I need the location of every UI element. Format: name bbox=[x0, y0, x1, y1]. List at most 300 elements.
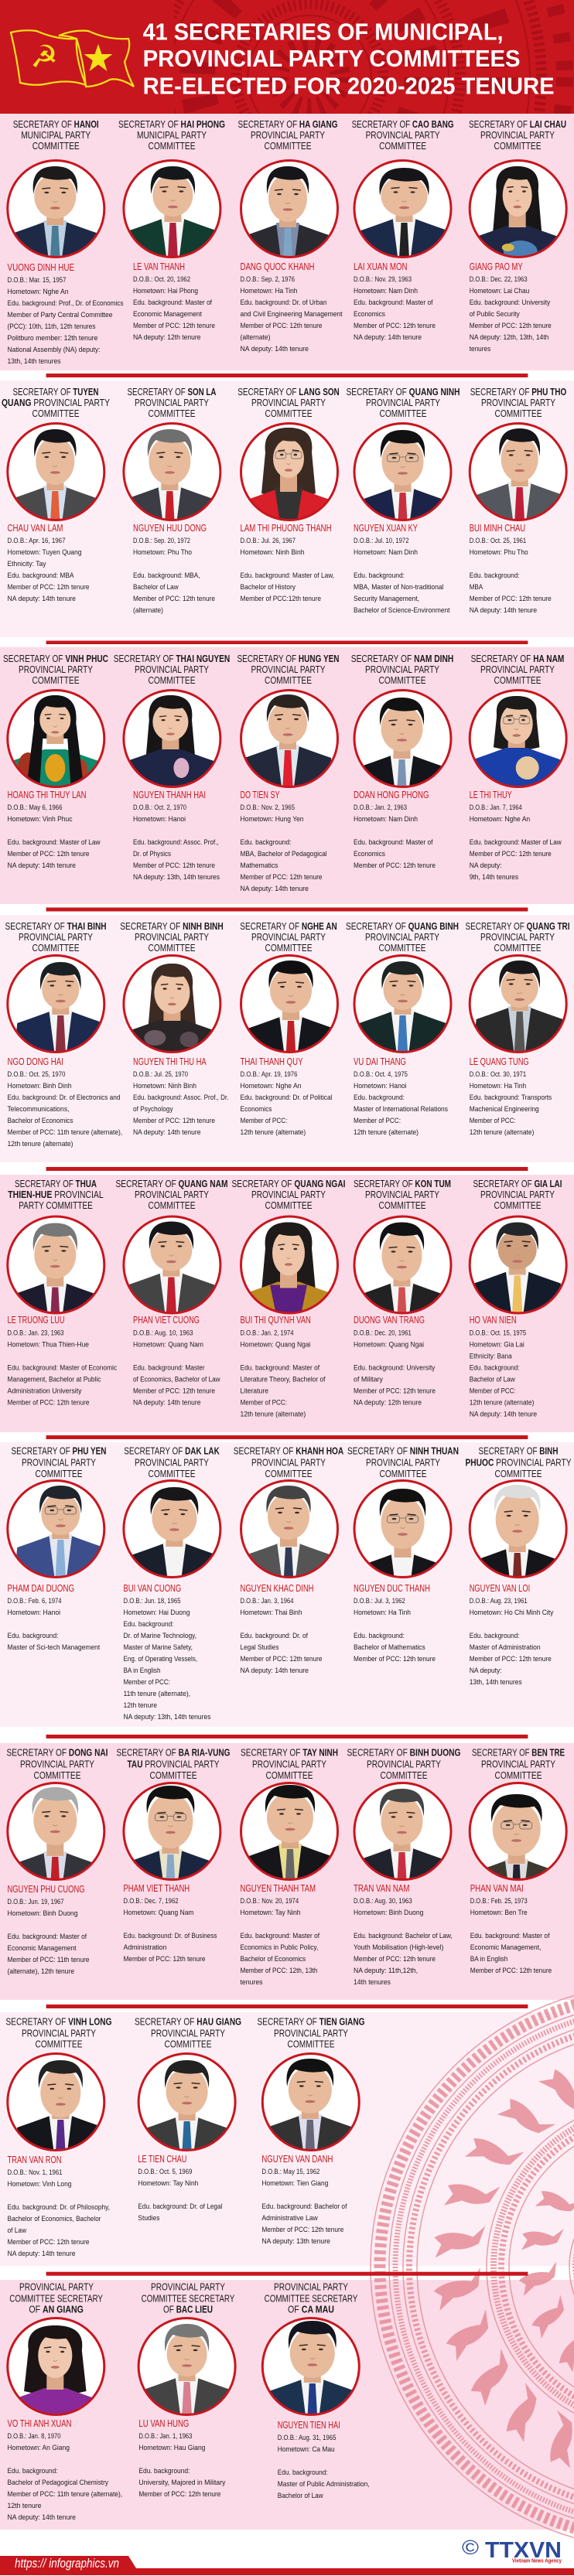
details: D.O.B.: Oct. 30, 1971 bbox=[470, 1070, 526, 1079]
heading: COMMITTEE bbox=[265, 1469, 313, 1479]
heading: COMMITTEE bbox=[149, 675, 195, 686]
portrait bbox=[240, 422, 339, 521]
heading bbox=[265, 2282, 358, 2315]
details: Member of PCC: 12th tenure bbox=[8, 850, 90, 858]
heading: COMMITTEE bbox=[149, 1200, 195, 1211]
heading: PARTY COMMITTEE bbox=[19, 1200, 93, 1211]
heading bbox=[114, 653, 230, 686]
details: 12th tenure bbox=[124, 1701, 157, 1710]
heading bbox=[124, 1446, 220, 1479]
details: tenures bbox=[240, 1978, 263, 1987]
card: Vinh Long bbox=[6, 2017, 111, 2258]
heading bbox=[240, 921, 337, 954]
logo: TTXVN: Vietnam News Agency bbox=[512, 2558, 562, 2564]
heading: SECRETARY OF DONG NAI bbox=[6, 1748, 108, 1759]
details: Hometown: Hanoi bbox=[133, 815, 186, 824]
heading: PROVINCIAL PARTY bbox=[365, 932, 440, 943]
heading bbox=[354, 1179, 451, 1211]
title: PROVINCIAL PARTY COMMITTEES bbox=[143, 45, 521, 72]
details: Hometown: Binh Dinh bbox=[8, 1082, 71, 1090]
details: Administrative Law bbox=[261, 2214, 318, 2223]
details: D.O.B.: Apr. 19, 1976 bbox=[240, 1070, 297, 1079]
portrait bbox=[240, 690, 337, 800]
details: Edu. background: Dr. of Urban bbox=[240, 299, 326, 307]
details: Hometown: Vinh Phuc bbox=[8, 815, 73, 824]
details bbox=[240, 804, 326, 893]
details: Hometown: Nam Dinh bbox=[354, 815, 418, 824]
portrait bbox=[122, 954, 221, 1053]
portrait bbox=[7, 1783, 104, 1907]
heading: COMMITTEE bbox=[265, 408, 313, 419]
details: Edu. background: Master bbox=[133, 1364, 205, 1372]
details: Member of PCC: 12th tenure bbox=[133, 322, 215, 330]
heading: TAU PROVINCIAL PARTY bbox=[127, 1759, 220, 1770]
card: Lang Son bbox=[237, 387, 340, 603]
details: Hometown: Tien Giang bbox=[261, 2179, 328, 2188]
details: MBA bbox=[470, 583, 483, 592]
card: Dak Lak bbox=[124, 1446, 222, 1721]
heading: COMMITTEE bbox=[149, 1469, 195, 1479]
heading: PROVINCIAL PARTY bbox=[366, 397, 441, 408]
details: D.O.B.: Sep. 20, 1972 bbox=[133, 537, 190, 545]
details: Legal Studies bbox=[240, 1643, 279, 1652]
portrait bbox=[241, 1216, 337, 1336]
portrait bbox=[470, 1480, 566, 1603]
details: Hometown: Thai Binh bbox=[240, 1609, 302, 1617]
details: Member of PCC: 12th tenure bbox=[133, 1117, 215, 1125]
details bbox=[354, 1329, 436, 1407]
details: Member of PCC: bbox=[354, 1117, 401, 1125]
details bbox=[240, 1329, 326, 1418]
portrait bbox=[354, 1783, 451, 1902]
name: BUI MINH CHAU bbox=[470, 523, 525, 534]
portrait bbox=[8, 1480, 108, 1590]
details: Hometown: Nam Dinh bbox=[354, 548, 418, 557]
heading: SECRETARY OF LANG SON bbox=[237, 387, 340, 397]
heading: SECRETARY OF QUANG NGAI bbox=[232, 1179, 345, 1189]
details: Member of PCC: 12th tenure bbox=[470, 850, 552, 858]
heading: OF CA MAU bbox=[288, 2305, 334, 2315]
heading: PROVINCIAL PARTY bbox=[251, 130, 326, 141]
heading: SECRETARY OF BA RIA-VUNG bbox=[116, 1748, 231, 1759]
name: LE TRUONG LUU bbox=[8, 1315, 65, 1326]
details: D.O.B.: Feb. 6, 1974 bbox=[8, 1597, 62, 1605]
details: Edu. background: Master of Law bbox=[470, 838, 562, 847]
card: Son La bbox=[121, 387, 220, 615]
details: NA deputy: 14th tenure bbox=[240, 1667, 309, 1675]
name: LAI XUAN MON bbox=[354, 261, 407, 272]
heading: PROVINCIAL PARTY bbox=[251, 1189, 326, 1200]
card: Ninh Thuan bbox=[347, 1446, 459, 1663]
details bbox=[8, 2168, 110, 2258]
heading bbox=[9, 2282, 103, 2315]
details: Edu. background: Dr. of Business bbox=[124, 1932, 217, 1940]
section rules bbox=[46, 374, 528, 2276]
details: Member of PCC: 12th tenure bbox=[8, 583, 90, 592]
details bbox=[8, 2432, 122, 2522]
heading: SECRETARY OF DAK LAK bbox=[124, 1446, 220, 1457]
details: Literature Theory, Bachelor of bbox=[240, 1375, 326, 1384]
details bbox=[8, 1070, 122, 1148]
heading: SECRETARY OF LAI CHAU bbox=[469, 119, 566, 130]
details: Ethnicity: Tay bbox=[8, 560, 46, 568]
card: Tien Giang bbox=[257, 2017, 365, 2246]
details: Economics in Public Policy, bbox=[240, 1943, 318, 1952]
details bbox=[138, 2168, 222, 2223]
heading: SECRETARY OF THUA bbox=[15, 1179, 97, 1189]
details: Hometown: Nghe An bbox=[470, 815, 530, 824]
details: Hometown: Ca Mau bbox=[278, 2445, 335, 2454]
portrait bbox=[469, 422, 568, 521]
heading: COMMITTEE bbox=[379, 943, 425, 954]
details: Bachelor of Mathematics bbox=[354, 1643, 425, 1652]
heading: COMMITTEE SECRETARY bbox=[142, 2294, 235, 2305]
website link: https:// infographics.vn bbox=[15, 2556, 119, 2571]
details: Hometown: Ha Tinh bbox=[470, 1082, 526, 1090]
details: Literature bbox=[240, 1387, 268, 1395]
portrait bbox=[138, 2054, 235, 2172]
heading: SECRETARY OF HUNG YEN bbox=[237, 653, 339, 664]
details: 9th, 14th tenures bbox=[470, 873, 518, 882]
details: 14th tenures bbox=[354, 1978, 391, 1987]
details: Youth Mobilisation (High-level) bbox=[354, 1943, 443, 1952]
details: Administration bbox=[124, 1943, 167, 1952]
details bbox=[354, 537, 450, 615]
name: BUI THI QUYNH VAN bbox=[240, 1315, 311, 1326]
details: D.O.B.: Jul. 10, 1972 bbox=[354, 537, 408, 545]
details: NA deputy: 14th tenure bbox=[133, 1398, 201, 1407]
details: Edu. background: bbox=[124, 1620, 173, 1629]
details: D.O.B.: Jan. 23, 1963 bbox=[8, 1329, 63, 1338]
details: Hometown: Phu Tho bbox=[133, 548, 192, 557]
details: Studies bbox=[138, 2214, 160, 2223]
details: Member of PCC: 12th tenure bbox=[261, 2226, 343, 2234]
details: Hometown: Hai Duong bbox=[124, 1609, 190, 1617]
heading: PROVINCIAL PARTY bbox=[251, 1458, 326, 1469]
details: Edu. background: Master of Economic bbox=[8, 1364, 117, 1372]
portrait bbox=[470, 956, 568, 1062]
details: (PCC): 10th, 11th, 12th tenures bbox=[8, 322, 96, 331]
details: NA deputy: bbox=[470, 1667, 502, 1675]
card: Tay Ninh bbox=[240, 1748, 338, 1987]
details: NA deputy: 14th tenure bbox=[8, 2513, 76, 2522]
heading bbox=[347, 387, 460, 419]
heading: COMMITTEE bbox=[32, 675, 79, 686]
portrait bbox=[354, 1216, 451, 1338]
heading: PROVINCIAL PARTY bbox=[20, 1759, 95, 1770]
details: Economics bbox=[354, 850, 385, 858]
heading: PROVINCIAL PARTY bbox=[251, 397, 326, 408]
details: Economic Management bbox=[133, 310, 202, 319]
card: Cao Bang bbox=[352, 119, 454, 342]
details: Bachelor of Economics bbox=[8, 1117, 73, 1125]
details: 12th tenure (alternate) bbox=[240, 1411, 306, 1418]
details: Hometown: Quang Ngai bbox=[240, 1341, 311, 1349]
heading bbox=[8, 1179, 104, 1211]
name: LE VAN THANH bbox=[133, 261, 185, 272]
heading: PROVINCIAL PARTY bbox=[480, 130, 555, 141]
name: PHAN VIET CUONG bbox=[133, 1315, 200, 1326]
heading: COMMITTEE bbox=[32, 141, 80, 152]
card: Thai Binh bbox=[5, 921, 122, 1148]
details: Edu. background: bbox=[8, 1632, 59, 1640]
heading: PROVINCIAL PARTY bbox=[481, 397, 556, 408]
heading: MUNICIPAL PARTY bbox=[137, 130, 207, 141]
heading: COMMITTEE bbox=[265, 141, 311, 152]
portrait bbox=[122, 689, 221, 788]
details bbox=[470, 1070, 552, 1137]
name: NGUYEN TIEN HAI bbox=[278, 2420, 340, 2431]
details: BA in English bbox=[124, 1667, 161, 1675]
name: THAI THANH QUY bbox=[240, 1056, 303, 1067]
details: Hometown: Vinh Long bbox=[8, 2180, 71, 2189]
details: Edu. background: Dr. of Legal bbox=[138, 2202, 222, 2211]
heading: COMMITTEE bbox=[494, 1200, 542, 1211]
details: Bachelor of Law bbox=[133, 583, 179, 592]
heading: SECRETARY OF KON TUM bbox=[354, 1179, 451, 1189]
heading bbox=[127, 387, 217, 419]
details: NA deputy: 14th tenure bbox=[470, 606, 537, 615]
details: Member of PCC: 11th tenure bbox=[8, 1956, 90, 1964]
details: Edu. background: Dr. of Political bbox=[240, 1094, 333, 1102]
heading: SECRETARY OF HANOI bbox=[13, 119, 99, 130]
details: Edu. background: bbox=[278, 2469, 328, 2477]
heading: SECRETARY OF HA GIANG bbox=[238, 119, 337, 130]
details: Member of PCC: 12th tenure bbox=[354, 1655, 436, 1663]
details: Hometown: Ben Tre bbox=[470, 1909, 528, 1917]
heading: PROVINCIAL PARTY bbox=[252, 1759, 327, 1770]
name: DO TIEN SY bbox=[240, 790, 280, 800]
details bbox=[133, 1070, 229, 1137]
details: Edu. background: bbox=[354, 1094, 405, 1102]
details: D.O.B.: Oct. 25, 1961 bbox=[470, 537, 526, 545]
name: PHAM DAI DUONG bbox=[8, 1583, 74, 1594]
heading: PROVINCIAL PARTY bbox=[481, 1759, 556, 1770]
details: NA deputy: 14th tenure bbox=[354, 333, 422, 342]
heading: SECRETARY OF VINH LONG bbox=[6, 2017, 111, 2028]
portrait bbox=[241, 1783, 338, 1899]
details: Master of Marine Safety, bbox=[124, 1643, 193, 1652]
heading: PROVINCIAL PARTY bbox=[274, 2028, 349, 2039]
details bbox=[470, 1329, 537, 1418]
details: Member of PCC: 12th tenure bbox=[240, 322, 322, 330]
details bbox=[354, 804, 436, 870]
details: D.O.B.: Oct. 15, 1975 bbox=[470, 1329, 526, 1338]
details: Ethnicity: Bana bbox=[470, 1352, 512, 1361]
details: Politburo member: 12th tenure bbox=[8, 334, 97, 343]
details: D.O.B.: Apr. 16, 1967 bbox=[8, 537, 65, 545]
portrait bbox=[6, 422, 105, 521]
heading: PROVINCIAL PARTY bbox=[365, 664, 440, 675]
portrait bbox=[123, 1216, 220, 1327]
details: Edu. background: bbox=[470, 571, 520, 580]
heading bbox=[11, 1446, 107, 1479]
card: Binh Duong bbox=[347, 1748, 461, 1987]
heading: PROVINCIAL PARTY bbox=[135, 1458, 210, 1469]
details: Hometown: Ho Chi Minh City bbox=[470, 1609, 554, 1617]
details: Edu. background: bbox=[354, 571, 405, 580]
name: PHAN VAN MAI bbox=[470, 1883, 524, 1894]
details: Member of PCC: bbox=[240, 1117, 287, 1125]
details: Member of PCC: 12th, 13th bbox=[240, 1967, 317, 1975]
details: Member of PCC: 12th tenure bbox=[354, 1387, 436, 1395]
details: Bachelor of Economics, Bachelor bbox=[8, 2215, 101, 2223]
details: Hometown: Phu Tho bbox=[470, 548, 528, 557]
heading: PROVINCIAL PARTY bbox=[19, 664, 94, 675]
heading: PROVINCIAL PARTY bbox=[365, 1189, 440, 1200]
details: D.O.B.: May 15, 1962 bbox=[261, 2168, 319, 2176]
details: NA deputy: 12th tenure bbox=[133, 333, 201, 342]
details: Hometown: Gia Lai bbox=[470, 1341, 524, 1349]
details: Edu. background: bbox=[138, 2467, 190, 2475]
heading bbox=[2, 387, 111, 419]
heading bbox=[142, 2282, 235, 2315]
portrait bbox=[8, 2054, 108, 2170]
details: Hometown: Hanoi bbox=[8, 1609, 60, 1617]
details: Member of PCC: 12th tenure bbox=[133, 862, 215, 870]
details: Hometown: Nghe An bbox=[8, 288, 68, 296]
details: Hometown: Hung Yen bbox=[240, 815, 303, 824]
heading bbox=[118, 119, 225, 152]
name: TRAN VAN RON bbox=[8, 2155, 62, 2165]
details bbox=[470, 1597, 554, 1687]
details bbox=[133, 537, 215, 615]
details: of Public Security bbox=[470, 310, 520, 319]
details: 13th, 14th tenures bbox=[470, 1678, 522, 1687]
details: D.O.B.: Jun. 18, 1965 bbox=[124, 1597, 181, 1605]
details: Master of Public Administration, bbox=[278, 2480, 370, 2489]
logo: TTXVN bbox=[462, 2536, 562, 2564]
heading: SECRETARY OF HA NAM bbox=[471, 653, 564, 664]
details: D.O.B.: Aug. 30, 1963 bbox=[354, 1897, 412, 1906]
details: tenures bbox=[470, 345, 490, 353]
name: NGUYEN PHU CUONG bbox=[8, 1884, 85, 1895]
heading: PROVINCIAL PARTY bbox=[135, 397, 210, 408]
details: Hometown: Hai Phong bbox=[133, 287, 198, 295]
card: Ha Nam bbox=[469, 653, 566, 882]
details: Economics bbox=[240, 1105, 272, 1114]
heading: MUNICIPAL PARTY bbox=[21, 130, 91, 141]
name: NGUYEN VAN LOI bbox=[470, 1583, 530, 1594]
name: VO THI ANH XUAN bbox=[8, 2418, 71, 2429]
details bbox=[354, 275, 436, 342]
heading bbox=[466, 1446, 572, 1479]
name: NGO DONG HAI bbox=[8, 1056, 63, 1067]
heading bbox=[13, 119, 99, 152]
title bbox=[143, 19, 555, 100]
name: NGUYEN VAN DANH bbox=[261, 2154, 333, 2165]
details: of Law bbox=[8, 2226, 26, 2235]
details: Member of PCC: 12th tenure bbox=[470, 1655, 552, 1663]
heading bbox=[241, 1748, 338, 1781]
heading: PROVINCIAL PARTY bbox=[135, 932, 210, 943]
details: Edu. background: bbox=[470, 1364, 520, 1372]
portrait bbox=[6, 954, 105, 1053]
details: Economic Management bbox=[8, 1944, 77, 1953]
name: NGUYEN THI THU HA bbox=[133, 1056, 207, 1067]
details: NA deputy: 13th, 14th tenures bbox=[133, 873, 220, 882]
heading: SECRETARY OF KHANH HOA bbox=[234, 1446, 343, 1457]
details: Member of PCC: bbox=[470, 1117, 516, 1125]
portrait bbox=[122, 1783, 220, 1905]
details: Edu. background: University bbox=[470, 299, 550, 307]
heading: SECRETARY OF PHU THO bbox=[470, 387, 566, 397]
heading: COMMITTEE bbox=[36, 1469, 82, 1479]
heading: COMMITTEE bbox=[265, 675, 312, 686]
card: Ninh Binh bbox=[120, 921, 229, 1137]
card: Thai Nguyen bbox=[114, 653, 230, 882]
title: 41 SECRETARIES OF MUNICIPAL, bbox=[143, 19, 504, 46]
heading: SECRETARY OF QUANG NAM bbox=[116, 1179, 227, 1189]
details: Member of PCC: 12th tenure bbox=[124, 1955, 206, 1964]
name: DANG QUOC KHANH bbox=[240, 261, 314, 272]
portrait bbox=[138, 2318, 235, 2432]
icon: party flag bbox=[11, 30, 86, 85]
details: Edu. background: Prof., Dr. of Economics bbox=[8, 299, 124, 308]
heading bbox=[237, 653, 339, 686]
details: Member of PCC: 12th tenure bbox=[470, 322, 552, 330]
header drum pattern bbox=[174, 0, 573, 114]
details: Master of Administration bbox=[470, 1643, 541, 1652]
details: Eng. of Operating Vessels, bbox=[124, 1655, 197, 1663]
heading: COMMITTEE bbox=[265, 1200, 313, 1211]
heading: SECRETARY OF BINH DUONG bbox=[347, 1748, 461, 1759]
heading bbox=[116, 1748, 231, 1781]
details: Member of PCC: 12th tenure bbox=[8, 2238, 90, 2247]
details: Member of PCC: 12th tenure bbox=[354, 322, 436, 330]
details: Hometown: Ha Tinh bbox=[354, 1609, 411, 1617]
details: Edu. background: Master of bbox=[470, 1932, 550, 1940]
details bbox=[8, 276, 124, 366]
heading: SECRETARY OF THAI BINH bbox=[5, 921, 107, 932]
details: Edu. background: Master of bbox=[133, 299, 212, 307]
heading: PROVINCIAL PARTY bbox=[251, 664, 326, 675]
name: TRAN VAN NAM bbox=[354, 1883, 409, 1894]
details: Hometown: Quang Nam bbox=[133, 1341, 203, 1349]
portrait bbox=[354, 956, 451, 1066]
details: Member of PCC: 12th tenure bbox=[240, 1655, 322, 1663]
name: LE TIEN CHAU bbox=[138, 2154, 186, 2165]
details: Hometown: Thua Thien-Hue bbox=[8, 1341, 89, 1349]
details: D.O.B.: Jan. 2, 1963 bbox=[354, 804, 407, 812]
details: Member of PCC: 12th tenure bbox=[240, 873, 322, 882]
details: D.O.B.: Aug. 10, 1963 bbox=[133, 1329, 193, 1338]
portrait bbox=[262, 2054, 359, 2170]
details: Edu. background: MBA bbox=[8, 571, 74, 580]
card: Tuyen Quang bbox=[2, 387, 111, 603]
details: Edu. background: Assoc. Prof., bbox=[133, 838, 219, 847]
details: Security Management, bbox=[354, 595, 419, 603]
details bbox=[240, 537, 334, 603]
portrait bbox=[469, 159, 568, 258]
portrait bbox=[469, 1783, 566, 1915]
card: Quang Nam bbox=[116, 1179, 227, 1407]
details: D.O.B.: Feb. 25, 1973 bbox=[470, 1897, 528, 1906]
name: NGUYEN DUC THANH bbox=[354, 1583, 430, 1594]
details: 12th tenure bbox=[8, 2502, 42, 2510]
details: Bachelor of Economics bbox=[240, 1955, 306, 1964]
card: Ben Tre bbox=[469, 1748, 566, 1975]
card: Ba Ria-Vung Tau bbox=[116, 1748, 231, 1964]
details: Bachelor of Law bbox=[470, 1375, 515, 1384]
name: LAM THI PHUONG THANH bbox=[240, 523, 331, 534]
heading: PROVINCIAL PARTY bbox=[22, 2028, 97, 2039]
heading: PROVINCIAL PARTY bbox=[135, 664, 210, 675]
details: Administration University bbox=[8, 1387, 82, 1395]
heading bbox=[6, 2017, 111, 2050]
heading: PROVINCIAL PARTY bbox=[480, 664, 555, 675]
details: Member of PCC: bbox=[240, 1398, 287, 1407]
